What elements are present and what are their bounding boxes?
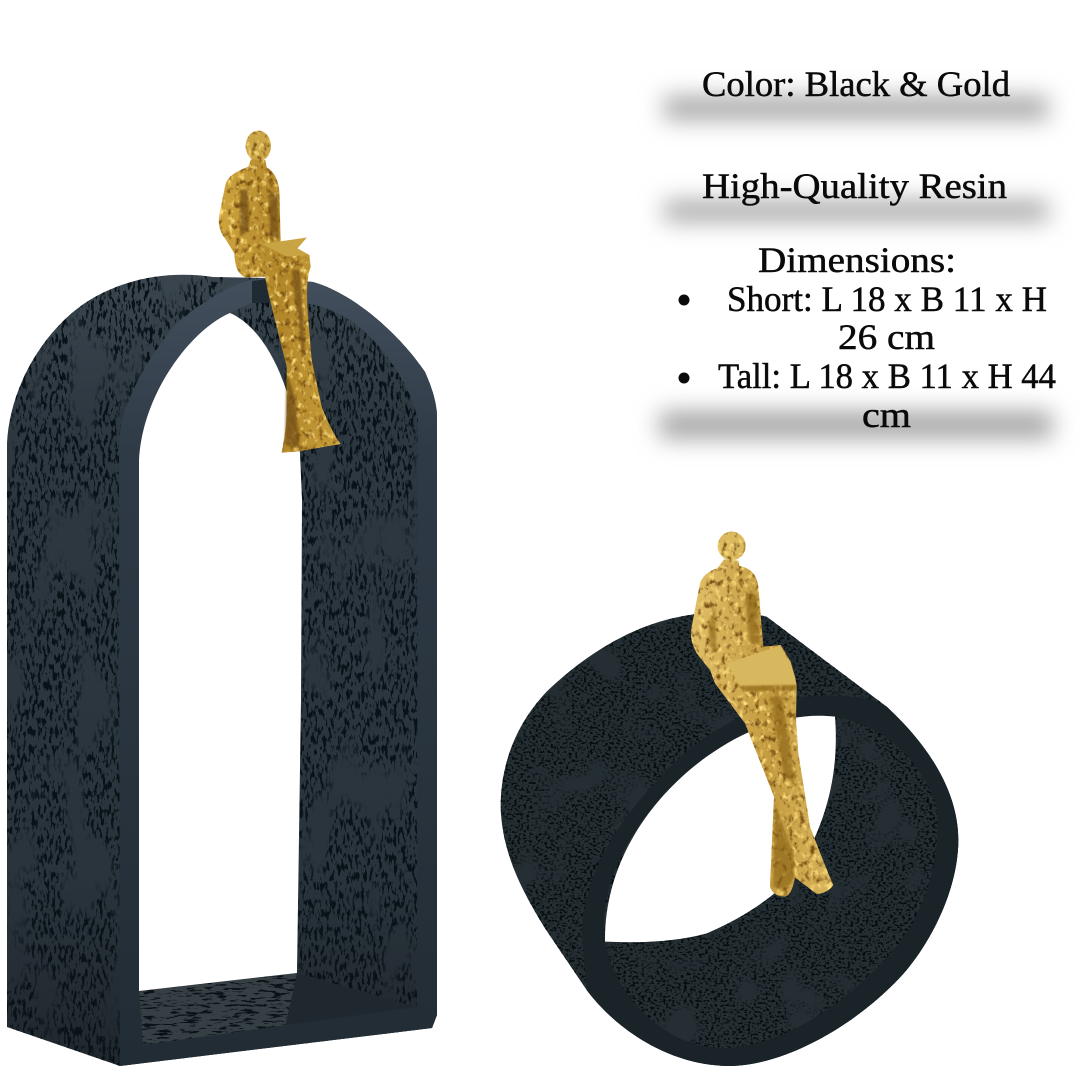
- ring figure book: [727, 646, 797, 686]
- text: color: Color: Black & Gold: [702, 64, 1010, 104]
- arch figure shadows: [240, 188, 305, 448]
- arch figure body and legs: [219, 159, 341, 453]
- arch figure head: [246, 131, 271, 161]
- text: material: High-Quality Resin: [702, 166, 1007, 206]
- shadow band: dimensions: [660, 412, 1052, 438]
- ring opening: [605, 716, 836, 942]
- round ring sculpture: [500, 614, 958, 1066]
- short dimensions continued: 26 cm: [838, 317, 935, 357]
- arch speckle texture: [0, 270, 440, 1070]
- tall dimensions continued: cm: [862, 395, 911, 435]
- arch body silhouette: [7, 275, 437, 1066]
- ring figure shadows: [708, 592, 797, 890]
- arch front face: [119, 278, 437, 1066]
- gold figure on arch: [219, 131, 341, 453]
- ring front face: [582, 696, 958, 1066]
- short dimensions: Short: L 18 x B 11 x H: [727, 279, 1047, 319]
- shadow band: color: [664, 97, 1048, 119]
- tall arch sculpture: [0, 270, 440, 1070]
- ring body silhouette: [501, 612, 958, 1066]
- arch floor: [139, 973, 416, 1045]
- dimensions block: [678, 240, 1056, 435]
- tall dimensions: Tall: L 18 x B 11 x H 44: [718, 356, 1056, 396]
- arch figure book: [262, 238, 309, 257]
- bullet: tall: [678, 372, 690, 384]
- arch opening: [139, 313, 302, 991]
- shadow band: material: [664, 201, 1048, 221]
- ring speckle texture: [500, 614, 958, 1066]
- arch shadow under figure: [252, 279, 270, 303]
- ring figure body and legs: [691, 559, 833, 897]
- dimensions heading: Dimensions:: [758, 240, 956, 280]
- gold figure on ring: [691, 532, 833, 897]
- bullet: short: [678, 294, 690, 306]
- ring figure head: [718, 532, 746, 560]
